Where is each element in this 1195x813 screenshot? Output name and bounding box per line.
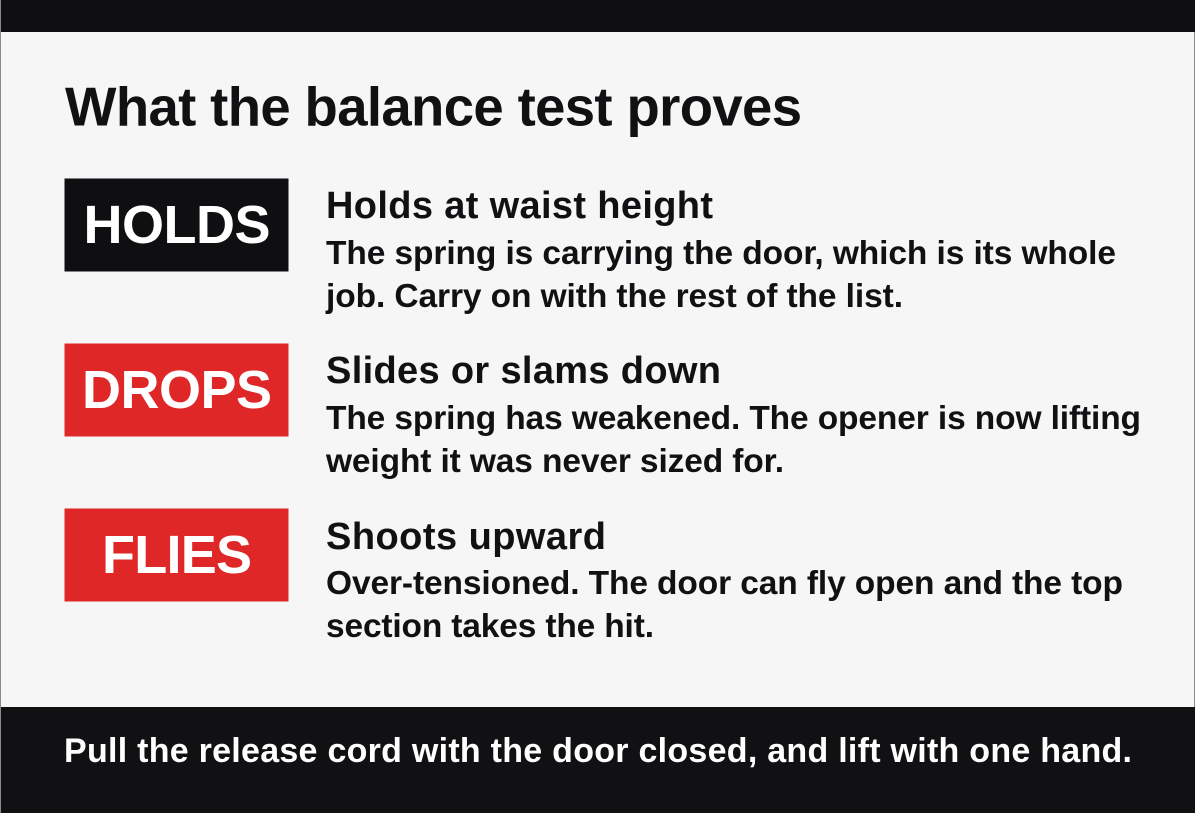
- text: drops description: The spring has weakened. The opener is now lifting: [326, 400, 1141, 437]
- heading: drops: Slides or slams down: [326, 350, 721, 392]
- row: holds: [64, 178, 1116, 315]
- text: drops description: weight it was never sized for.: [325, 443, 784, 480]
- tag: holds: HOLDS: [84, 195, 270, 255]
- heading: flies: Shoots upward: [326, 516, 606, 558]
- tag: drops: [64, 344, 288, 436]
- text: flies description: section takes the hit.: [326, 608, 654, 645]
- text: flies description: [326, 565, 1123, 645]
- text: flies description: Over-tensioned. The door can fly open and the top: [326, 565, 1123, 602]
- row: flies: [64, 508, 1123, 645]
- text: holds description: [325, 235, 1116, 315]
- bottom bar: [1, 707, 1195, 813]
- text: holds description: The spring is carrying the door, which is its whole: [326, 235, 1116, 272]
- tag: flies: [64, 508, 288, 602]
- text: holds description: job. Carry on with the rest of the list.: [325, 278, 903, 315]
- heading: holds: Holds at waist height: [326, 185, 713, 227]
- top bar: [1, 0, 1195, 32]
- tag: flies: FLIES: [102, 525, 252, 585]
- title: What the balance test proves: [65, 76, 802, 138]
- tag: holds: [64, 178, 288, 272]
- tag: drops: DROPS: [82, 360, 272, 420]
- text: drops description: [325, 400, 1141, 480]
- row: drops: [64, 344, 1141, 480]
- footer text: Pull the release cord with the door closed, and lift with one hand.: [64, 732, 1132, 770]
